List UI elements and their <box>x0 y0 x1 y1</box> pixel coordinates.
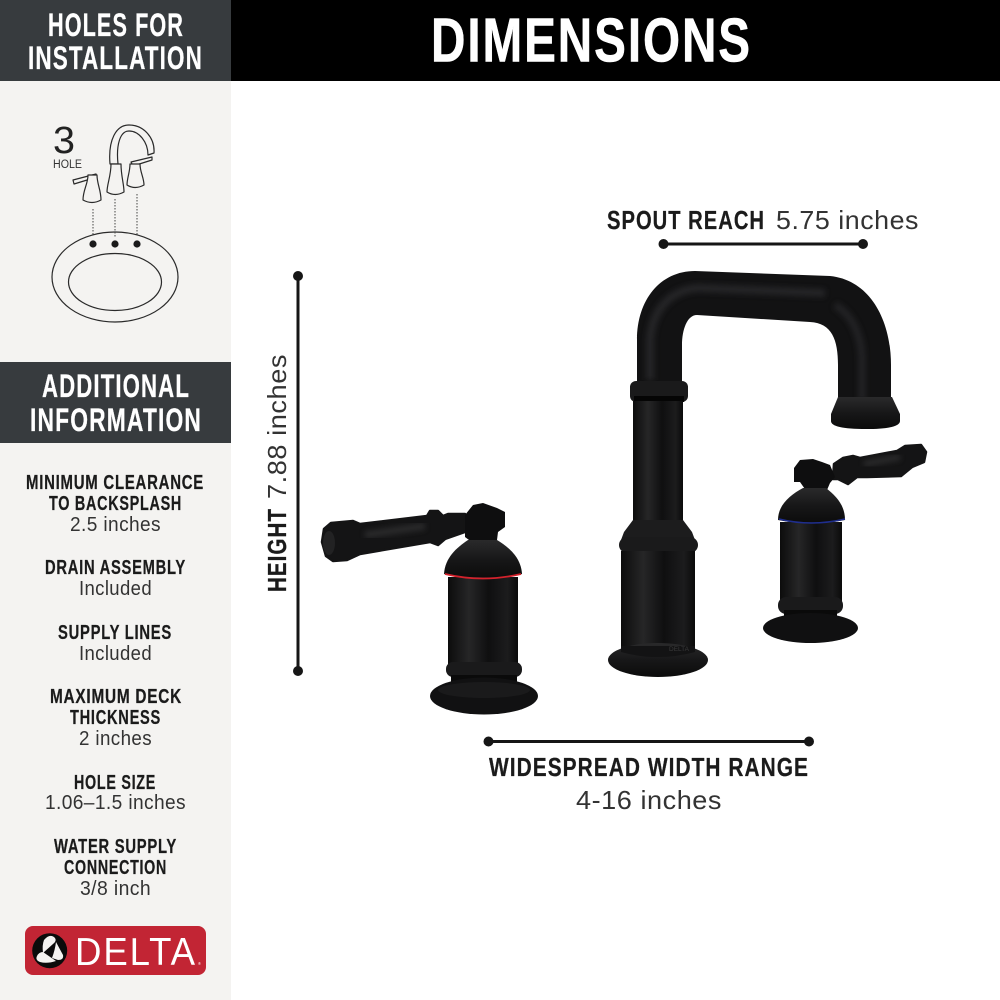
spec: maximum deck thickness: 2 inches <box>79 728 152 750</box>
number label: 3 hole <box>53 120 82 171</box>
left sidebar panel <box>0 81 231 1000</box>
sink basin <box>52 232 178 322</box>
height label <box>262 354 292 592</box>
lever arm <box>833 445 926 484</box>
header: additional information: ADDITIONAL <box>42 368 190 404</box>
base foot <box>608 643 708 677</box>
spec: maximum deck thickness: MAXIMUM DECK <box>50 686 182 708</box>
header: holes for installation: INSTALLATION <box>28 40 203 76</box>
spout outlet <box>831 397 900 429</box>
brand logo: Delta: ® <box>198 961 201 966</box>
spec: maximum deck thickness: THICKNESS <box>70 707 161 729</box>
spec: drain assembly: Included <box>79 578 152 600</box>
spec: drain assembly <box>45 557 186 600</box>
width label: WIDESPREAD WIDTH RANGE <box>489 752 809 782</box>
header: additional information: INFORMATION <box>30 402 202 438</box>
height label: HEIGHT <box>262 508 292 592</box>
icon: three-hole faucet over sink <box>52 120 178 322</box>
spout reach label: SPOUT REACH <box>607 205 765 235</box>
faucet outline <box>73 125 154 202</box>
handle base <box>763 613 858 643</box>
handle dome <box>444 540 522 579</box>
spec: hole size: 1.06–1.5 inches <box>45 792 186 814</box>
dimension: spout reach <box>607 205 919 249</box>
lower body <box>621 551 695 651</box>
spec: water supply connection: WATER SUPPLY <box>54 836 177 858</box>
sink holes <box>89 240 141 248</box>
spec: maximum deck thickness <box>50 686 182 750</box>
column <box>633 401 683 529</box>
title bar: dimensions: DIMENSIONS <box>431 6 752 76</box>
handle ring <box>778 597 843 614</box>
spec: supply lines: SUPPLY LINES <box>58 622 172 644</box>
spout reach label: 5.75 inches <box>776 205 919 235</box>
header: additional information <box>0 362 231 443</box>
handle body <box>448 577 518 667</box>
dimension: height <box>262 271 303 676</box>
spout reach line <box>658 239 868 249</box>
spec: minimum clearance <box>26 472 204 536</box>
lower flare <box>621 520 695 540</box>
width line <box>484 736 814 746</box>
lever hub <box>794 459 835 492</box>
brand logo: Delta <box>25 926 206 975</box>
lever arm <box>322 511 465 561</box>
faucet: center spout <box>608 271 900 677</box>
dimension: widespread width range <box>484 736 814 815</box>
spout reach label <box>607 205 919 235</box>
lever hub <box>465 503 505 543</box>
height line <box>293 271 303 676</box>
spec: water supply connection: 3/8 inch <box>80 878 151 900</box>
spec: water supply connection <box>54 836 177 900</box>
header: holes for installation <box>0 0 231 81</box>
dotted guide lines <box>93 194 137 238</box>
spout tube <box>637 271 891 402</box>
faucet: center spout: DELTA <box>669 646 690 653</box>
spec: hole size <box>45 772 186 814</box>
handle dome <box>778 488 845 524</box>
header: holes for installation: HOLES FOR <box>48 7 184 43</box>
spec: minimum clearance: TO BACKSPLASH <box>49 493 182 515</box>
brand logo: Delta: DELTA <box>75 931 197 974</box>
spec: supply lines: Included <box>79 643 152 665</box>
spec: minimum clearance: 2.5 inches <box>70 514 161 536</box>
title bar: dimensions <box>231 0 1000 81</box>
width label: 4-16 inches <box>576 785 722 815</box>
faucet: left handle <box>322 503 538 714</box>
spec: drain assembly: DRAIN ASSEMBLY <box>45 557 186 579</box>
spec: supply lines <box>58 622 172 665</box>
spec: minimum clearance: MINIMUM CLEARANCE <box>26 472 204 494</box>
spec: water supply connection: CONNECTION <box>64 857 167 879</box>
width label <box>489 752 809 815</box>
handle body <box>780 522 842 602</box>
column collar <box>630 381 688 402</box>
handle ring <box>446 662 522 677</box>
number label: 3 hole: 3 <box>53 120 75 162</box>
spec: hole size: HOLE SIZE <box>74 772 156 794</box>
handle base <box>430 678 538 714</box>
number label: 3 hole: HOLE <box>53 159 82 171</box>
faucet: right handle <box>763 445 926 643</box>
height label: 7.88 inches <box>262 354 292 499</box>
